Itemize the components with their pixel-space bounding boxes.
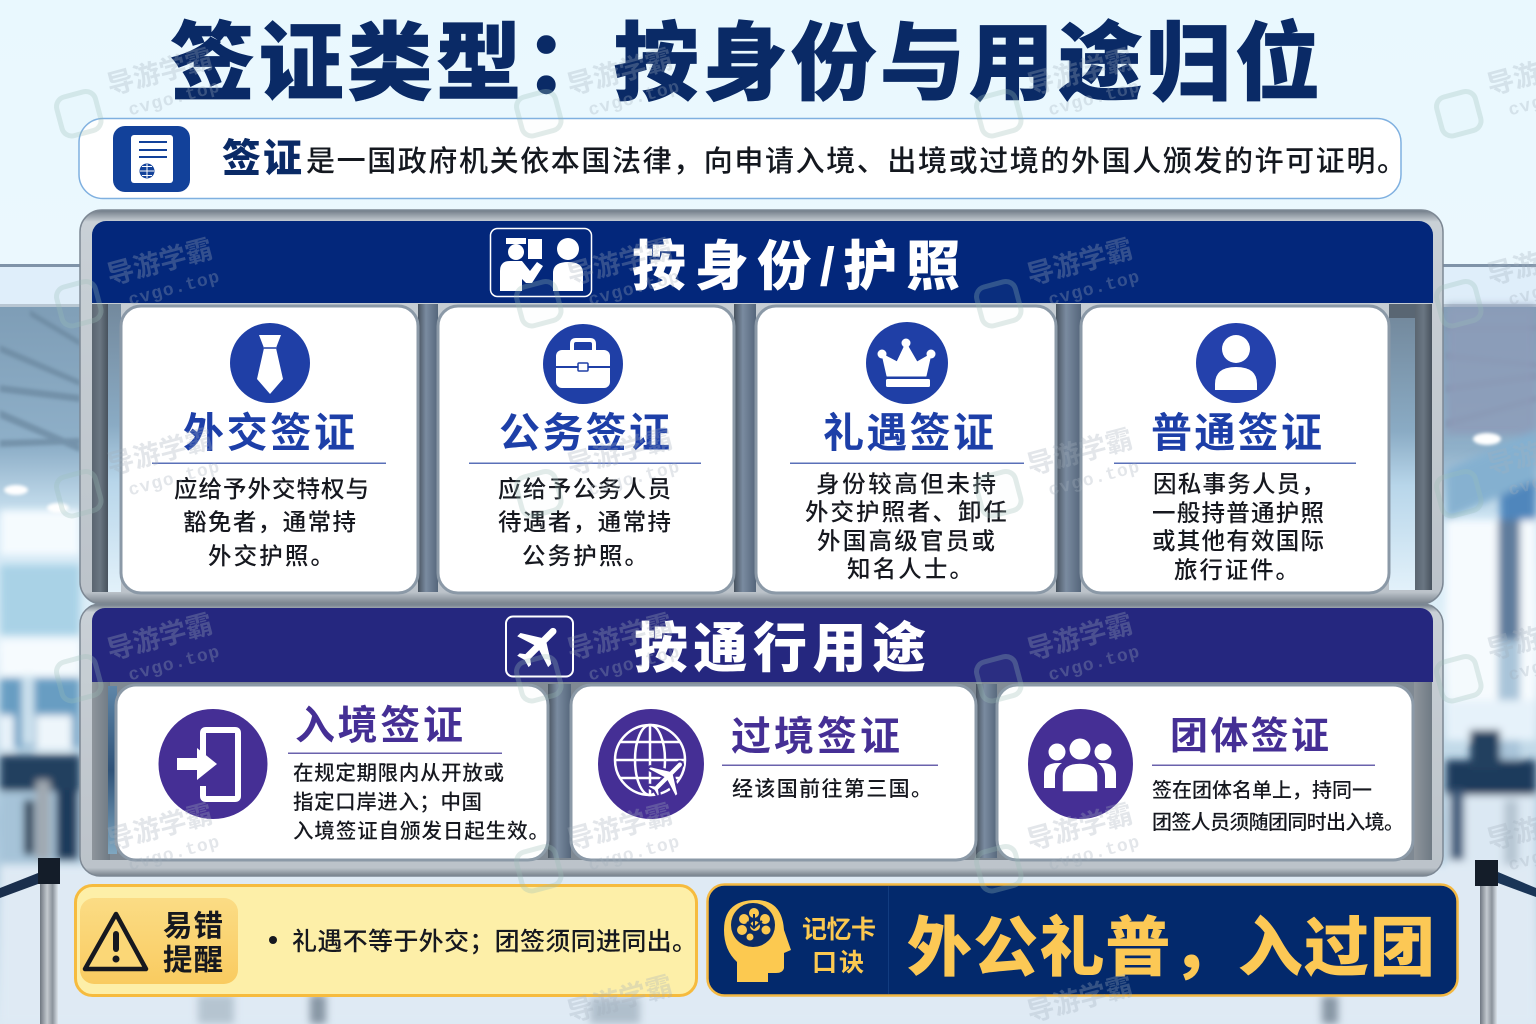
card: official visa: 公务签证: [499, 410, 670, 456]
watermarks: 导游学霸: [104, 799, 216, 856]
icon: crown: [866, 322, 948, 404]
card: ordinary visa: 普通签证: [1151, 410, 1322, 456]
card: ordinary visa: 或其他有效国际: [1152, 528, 1324, 554]
title: 签证类型：按身份与用途归位: [170, 17, 1320, 112]
card: entry visa: 入境签证: [295, 704, 463, 748]
icon: passport document: [113, 126, 190, 192]
watermarks: cvgo.top: [1046, 78, 1143, 121]
card: official visa: 待遇者，通常持: [498, 509, 671, 535]
icon: airplane: [506, 613, 573, 677]
watermarks: 导游学霸: [564, 424, 676, 481]
card: courtesy visa: [756, 306, 1056, 593]
definition text: 是一国政府机关依本国法律，向申请入境、出境或过境的外国人颁发的许可证明。: [306, 145, 1406, 178]
watermarks: 导游学霸: [1024, 424, 1136, 481]
header title: 按通行用途: [634, 619, 926, 679]
callout: memory card: 记忆卡: [802, 916, 876, 944]
icon: door with arrow: [158, 709, 268, 819]
card: official visa: 公务护照。: [522, 543, 648, 569]
watermarks: 导游学霸: [104, 234, 216, 291]
card: courtesy visa: 身份较高但未持: [816, 471, 996, 497]
callout: memory card: 外公礼普，入过团: [907, 911, 1435, 984]
card: diplomatic visa: 应给予外交特权与: [174, 476, 369, 502]
warning badge: 易错: [163, 910, 223, 943]
icon: head with brain: [724, 900, 791, 982]
card: ordinary visa: [1081, 306, 1389, 593]
icon: group of people: [1028, 709, 1133, 819]
card: group visa: 团签人员须随团同时出入境。: [1152, 811, 1404, 834]
header title: 按身份/护照: [632, 237, 960, 297]
watermarks: 导游学霸: [1024, 234, 1136, 291]
watermarks: 导游学霸: [104, 609, 216, 666]
card: diplomatic visa: 豁免者，通常持: [183, 509, 356, 535]
watermarks: cvgo.top: [586, 458, 683, 501]
watermarks: cvgo.top: [1046, 643, 1143, 686]
watermarks: cvgo.top: [586, 643, 683, 686]
watermarks: cvgo.top: [126, 458, 223, 501]
callout: common mistakes: [76, 886, 697, 996]
watermarks: cvgo.top: [126, 268, 223, 311]
card: transit visa: 过境签证: [731, 715, 900, 759]
watermarks: 导游学霸: [104, 44, 216, 101]
icon: person: [1196, 323, 1276, 403]
card: ordinary visa: 因私事务人员，: [1153, 471, 1325, 497]
card: diplomatic visa: 外交签证: [183, 410, 355, 456]
definition bar: [79, 118, 1406, 198]
panel: by identity / passport: [80, 210, 1443, 604]
warning badge: 提醒: [163, 944, 223, 977]
watermarks: cvgo.top: [126, 643, 223, 686]
watermarks: cvgo.top: [126, 833, 223, 876]
callout: memory card: [708, 884, 1458, 996]
icon: briefcase: [543, 324, 623, 404]
watermarks: 导游学霸: [564, 799, 676, 856]
header band: [92, 221, 1433, 303]
icon: globe with plane: [598, 709, 704, 819]
icon: warning triangle: [85, 914, 146, 969]
panel: by travel purpose: [80, 604, 1443, 876]
watermarks: cvgo.top: [586, 268, 683, 311]
watermarks: 导游学霸: [1024, 799, 1136, 856]
watermarks: 导游学霸: [1024, 609, 1136, 666]
card: courtesy visa: 礼遇签证: [823, 410, 994, 456]
watermarks: cvgo.top: [586, 78, 683, 121]
card: ordinary visa: 一般持普通护照: [1152, 500, 1324, 526]
card: entry visa: 指定口岸进入；中国: [293, 791, 482, 814]
card: entry visa: [116, 685, 549, 860]
card: ordinary visa: 旅行证件。: [1174, 557, 1299, 583]
watermarks: 导游学霸: [564, 609, 676, 666]
card: official visa: 应给予公务人员: [498, 476, 671, 502]
card: transit visa: [571, 685, 976, 860]
card: group visa: 团体签证: [1170, 716, 1329, 758]
card: group visa: 签在团体名单上，持同一: [1152, 779, 1372, 802]
card: diplomatic visa: [121, 306, 418, 593]
header band: [92, 608, 1433, 682]
watermarks: cvgo.top: [586, 833, 683, 876]
warning badge: [80, 898, 238, 984]
watermarks: cvgo.top: [1046, 833, 1143, 876]
card: official visa: [438, 306, 734, 593]
card: courtesy visa: 外国高级官员或: [817, 528, 995, 554]
watermarks: cvgo.top: [1046, 268, 1143, 311]
icon: tie: [230, 323, 310, 403]
callout: memory card: 口诀: [812, 949, 864, 977]
definition text: [222, 138, 1406, 181]
card: courtesy visa: 知名人士。: [847, 556, 973, 582]
card: diplomatic visa: 外交护照。: [208, 543, 334, 569]
definition text: 签证: [222, 138, 302, 181]
watermarks: cvgo.top: [1046, 458, 1143, 501]
card: entry visa: 入境签证自颁发日起生效。: [293, 820, 549, 843]
watermarks: 导游学霸: [1024, 44, 1136, 101]
card: group visa: [997, 685, 1413, 860]
icon: officer and traveller: [490, 228, 592, 296]
watermarks: 导游学霸: [564, 234, 676, 291]
watermarks: cvgo.top: [126, 78, 223, 121]
card: courtesy visa: 外交护照者、卸任: [805, 499, 1007, 525]
watermarks: 导游学霸: [564, 44, 676, 101]
card: transit visa: 经该国前往第三国。: [732, 778, 932, 801]
watermarks: 导游学霸: [104, 424, 216, 481]
card: entry visa: 在规定期限内从开放或: [293, 762, 504, 785]
callout: common mistakes: 礼遇不等于外交；团签须同进同出。: [292, 928, 697, 956]
